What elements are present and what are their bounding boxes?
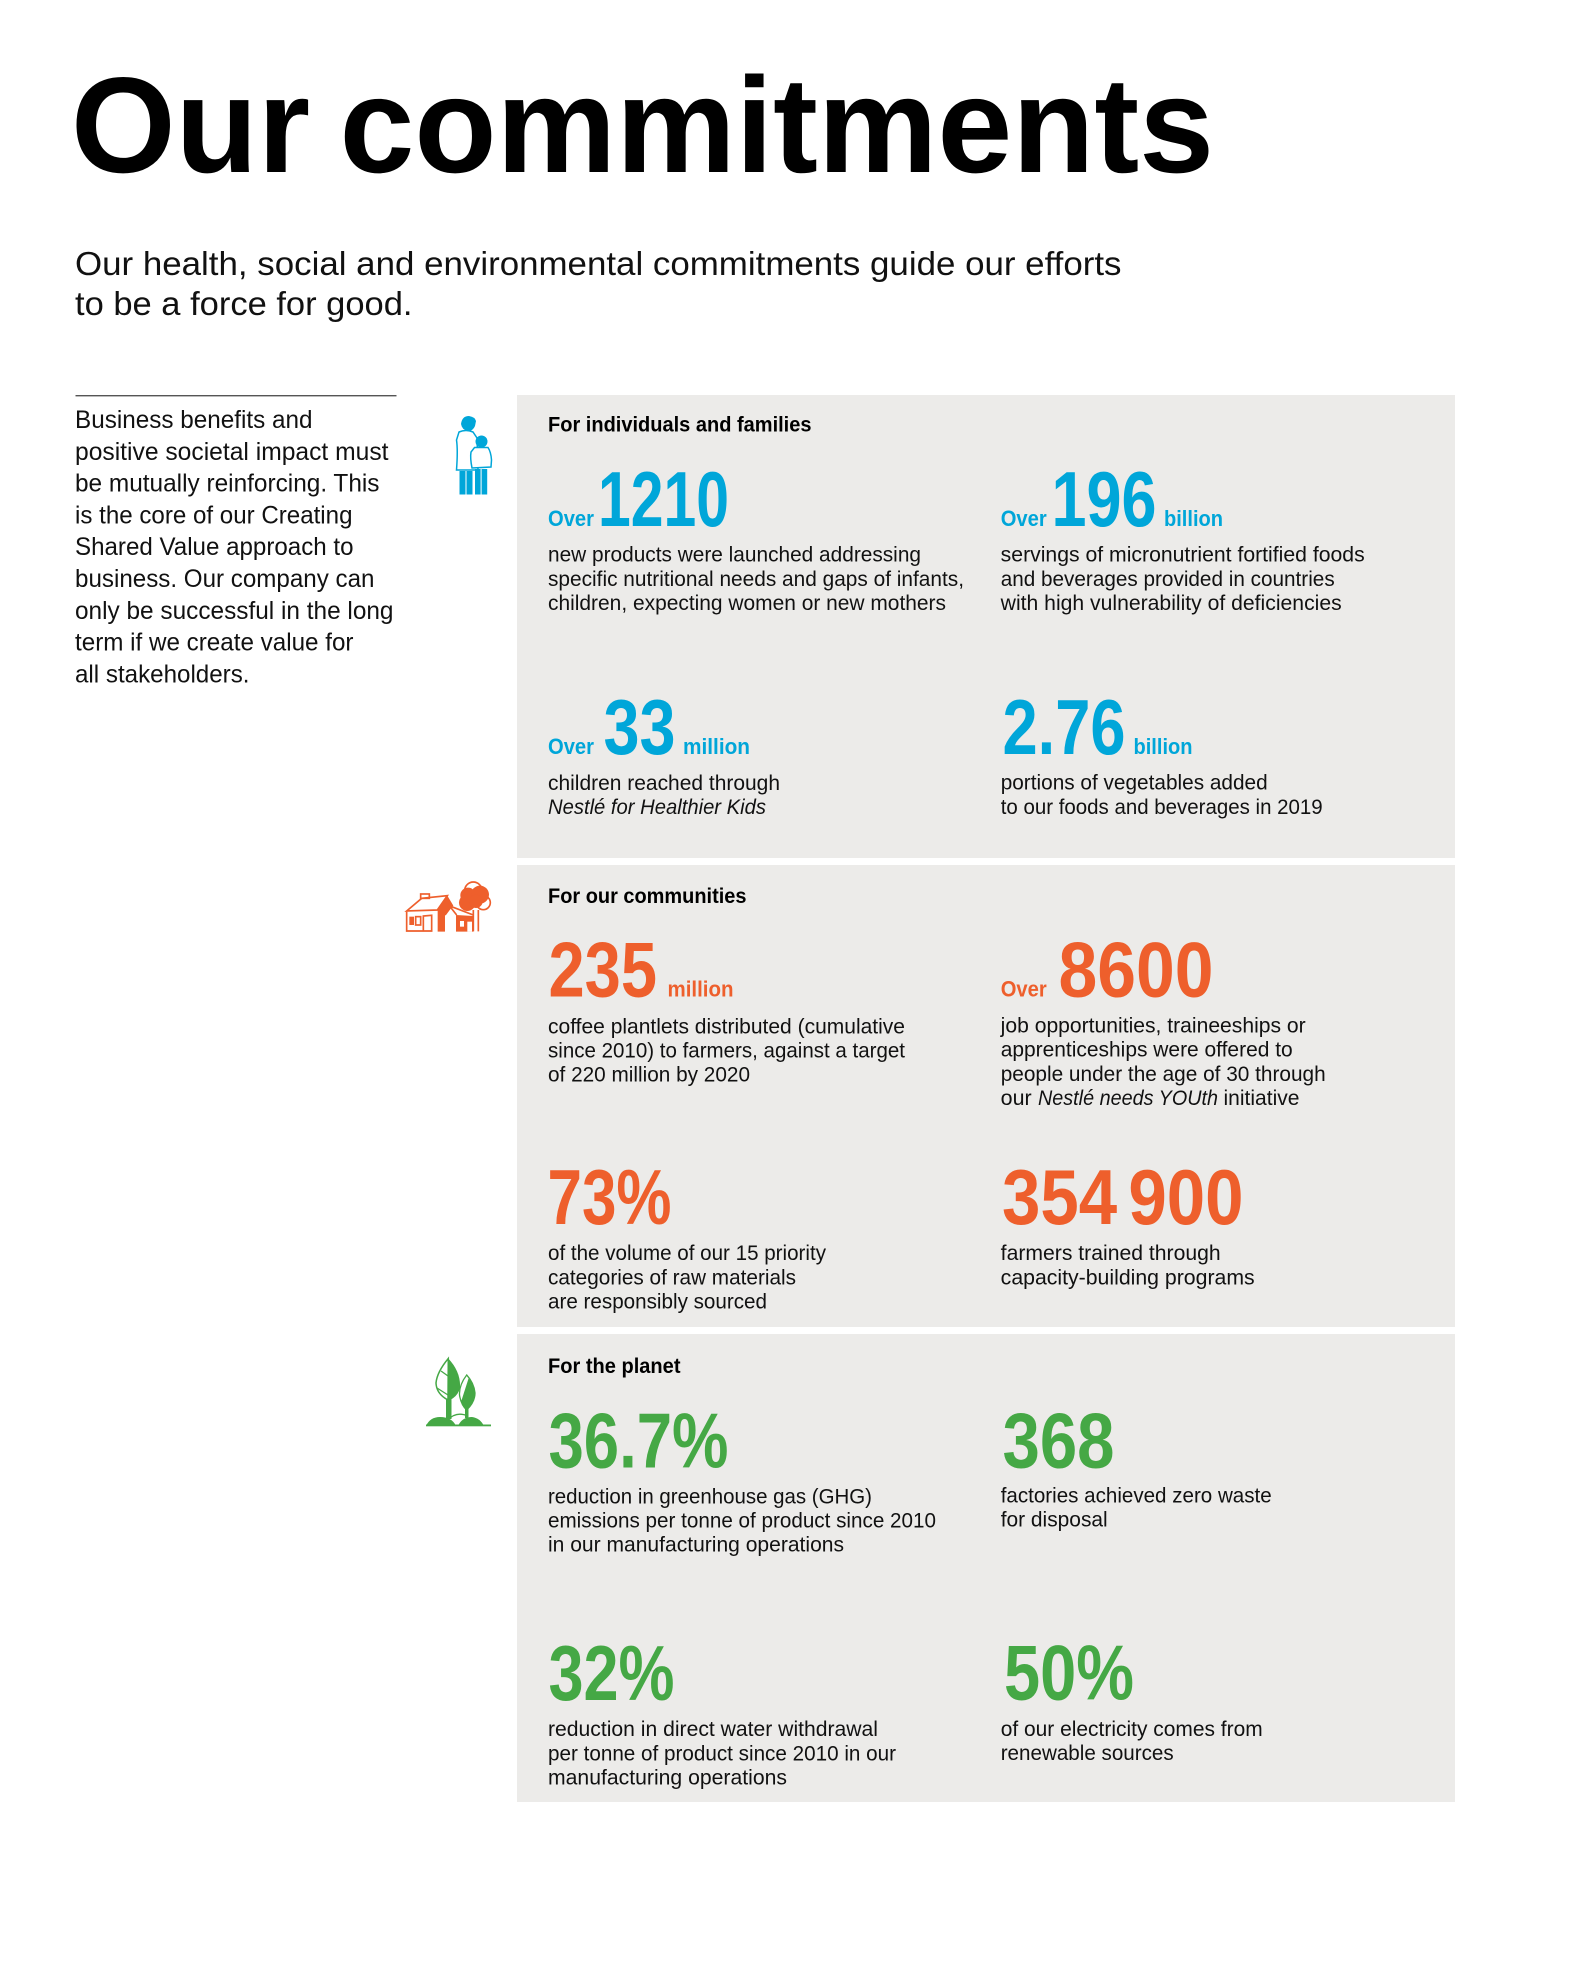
stat: over 1210: children, expecting women or new mothers (548, 592, 946, 615)
panel: for our communities (517, 865, 1455, 1327)
stat: 368 (1001, 1396, 1272, 1532)
stat: 354 900: farmers trained through (1001, 1242, 1221, 1265)
stat: over 8600: initiative (1224, 1087, 1300, 1110)
title: Our commitments (71, 49, 1214, 201)
stat: 36.7%: emissions per tonne of product since 2010 (548, 1510, 936, 1533)
stat: over 196 billion: servings of micronutrient fortified foods (1001, 544, 1365, 567)
subtitle: Our health, social and environmental commitments guide our efforts (75, 245, 1122, 282)
intro text block: all stakeholders. (75, 660, 250, 688)
heading: For our communities (548, 885, 746, 908)
intro text block: is the core of our Creating (75, 501, 352, 529)
stat: over 1210: specific nutritional needs and gaps of infants, (548, 568, 964, 591)
stat: 50%: renewable sources (1001, 1742, 1174, 1765)
stat: over 8600: our (1001, 1087, 1032, 1110)
stat: over 196 billion: 196 (1052, 455, 1156, 543)
stat: over 8600: 8600 (1058, 926, 1214, 1014)
stat: 73%: of the volume of our 15 priority (548, 1242, 826, 1265)
stat: 2.76 billion: 2.76 (1002, 683, 1126, 771)
stat: over 1210: Over (548, 506, 594, 531)
stat: over 1210: 1210 (598, 455, 729, 543)
stat: 36.7%: reduction in greenhouse gas (GHG) (548, 1485, 872, 1508)
stat: over 196 billion: with high vulnerability of deficiencies (1000, 592, 1342, 615)
subtitle: to be a force for good. (75, 285, 412, 322)
intro text block: Shared Value approach to (75, 533, 354, 561)
stat: 235 million: coffee plantlets distributed (cumulative (548, 1015, 905, 1038)
stat: 235 million: million (668, 977, 734, 1002)
stat: 36.7%: in our manufacturing operations (548, 1534, 844, 1557)
stat: over 196 billion: Over (1001, 506, 1047, 531)
intro text block: business. Our company can (75, 565, 374, 593)
subtitle (75, 245, 1122, 322)
stat: 32% (548, 1629, 896, 1789)
stat: 32%: 32% (548, 1629, 674, 1717)
stat: 73%: 73% (548, 1153, 672, 1241)
stat: 50%: 50% (1004, 1628, 1134, 1716)
intro text block (75, 406, 394, 688)
stat: 235 million: of 220 million by 2020 (548, 1064, 750, 1087)
intro text block: positive societal impact must (75, 438, 389, 466)
stat: over 196 billion (1000, 455, 1365, 615)
stat: over 8600: Over (1001, 977, 1047, 1002)
stat: over 8600: people under the age of 30 through (1001, 1063, 1326, 1086)
panel: for the planet (517, 1334, 1455, 1802)
heading: For the planet (548, 1355, 681, 1378)
stat: 354 900: 354 900 (1002, 1153, 1244, 1241)
stat: over 33 million: Over (548, 734, 594, 759)
icon: houses and tree (407, 882, 490, 932)
stat: 2.76 billion (1001, 683, 1323, 819)
intro text block: only be successful in the long (75, 597, 394, 625)
stat: over 1210 (548, 455, 964, 615)
stat: over 33 million: 33 (604, 683, 676, 771)
stat: 235 million: since 2010) to farmers, against a target (548, 1040, 905, 1063)
stat: over 8600: apprenticeships were offered to (1001, 1039, 1293, 1062)
stat: over 8600: job opportunities, traineeships or (1000, 1015, 1306, 1038)
intro text block: term if we create value for (75, 629, 354, 657)
stat: over 33 million (548, 683, 780, 819)
stat: 32%: manufacturing operations (548, 1766, 787, 1789)
stat: over 33 million: children reached through (548, 772, 780, 795)
stat: 36.7% (548, 1396, 936, 1557)
stat: 50%: of our electricity comes from (1001, 1718, 1263, 1741)
heading: For individuals and families (548, 414, 812, 436)
stat: 32%: per tonne of product since 2010 in our (548, 1742, 896, 1765)
intro text block: Business benefits and (75, 406, 312, 434)
icon: plant (426, 1358, 491, 1426)
stat: over 8600: Nestlé needs YOUth (1038, 1087, 1218, 1110)
stat: over 33 million: Nestlé for Healthier Kids (548, 796, 766, 819)
stat: 50% (1001, 1628, 1263, 1765)
stat: over 196 billion: billion (1164, 506, 1223, 531)
stat: 235 million (548, 926, 905, 1087)
stat: over 196 billion: and beverages provided in countries (1001, 568, 1335, 591)
stat: over 33 million: million (683, 734, 750, 759)
intro text block: be mutually reinforcing. This (75, 470, 380, 498)
stat: 2.76 billion: to our foods and beverages in 2019 (1001, 796, 1323, 819)
stat: 354 900: capacity-building programs (1001, 1266, 1255, 1289)
stat: 36.7%: 36.7% (548, 1396, 728, 1484)
stat: 2.76 billion: portions of vegetables added (1001, 772, 1268, 795)
stat: 368: for disposal (1001, 1509, 1108, 1532)
stat: 368: factories achieved zero waste (1001, 1485, 1272, 1508)
stat: 73%: categories of raw materials (548, 1266, 796, 1289)
stat: 235 million: 235 (548, 926, 657, 1014)
stat: 73%: are responsibly sourced (548, 1290, 767, 1313)
stat: over 1210: new products were launched addressing (548, 544, 921, 567)
icon: adult and child (456, 416, 492, 494)
stat: 2.76 billion: billion (1134, 734, 1192, 759)
stat: 354 900 (1001, 1153, 1255, 1289)
panel: for individuals and families (517, 395, 1455, 858)
stat: over 8600 (1000, 926, 1326, 1110)
stat: 368: 368 (1002, 1396, 1114, 1484)
stat: 32%: reduction in direct water withdrawal (548, 1718, 878, 1741)
stat: 73% (548, 1153, 826, 1313)
